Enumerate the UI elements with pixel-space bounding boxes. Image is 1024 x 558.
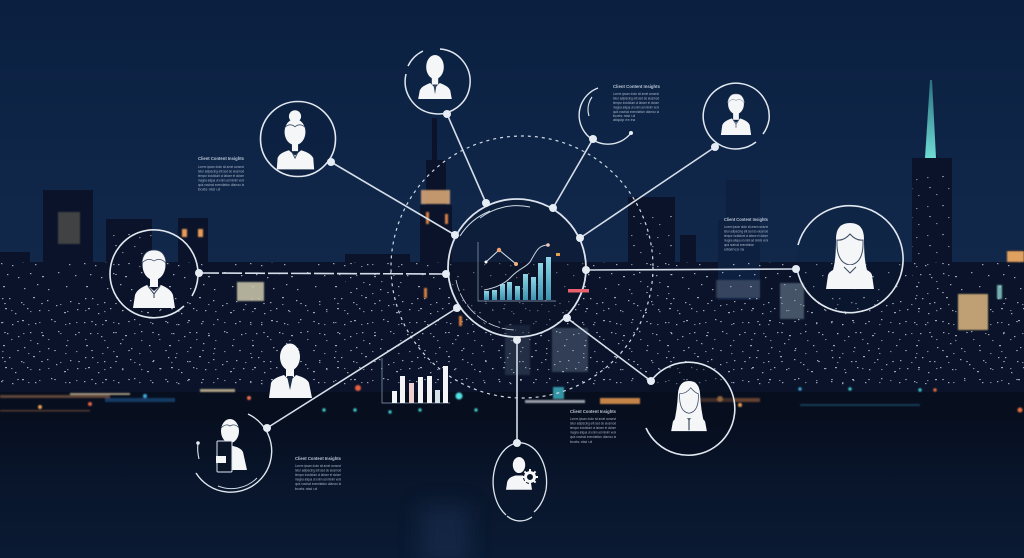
- text block: client note, over right building: Client Content Insights: [724, 217, 768, 223]
- text block: client note, lower left: tetur adipiscing elit sed do eiusmod: [295, 468, 341, 472]
- icon: [506, 457, 532, 490]
- icon: [671, 381, 707, 431]
- text block: client note, top right: boris nisi ut: [613, 114, 636, 118]
- node: [589, 135, 597, 143]
- shoreline lights: [0, 385, 1022, 414]
- node: [327, 158, 335, 166]
- icon: [133, 250, 175, 308]
- person: phone user, bottom left: [196, 414, 272, 492]
- person: man, left: [110, 230, 203, 318]
- open arc: [579, 88, 631, 144]
- ring: [110, 230, 198, 318]
- text block: client note, lower left: tempor incididunt ut labore et dolore: [295, 473, 341, 477]
- axes: [382, 358, 450, 403]
- city skyline: [0, 80, 1024, 422]
- text block: client note, lower centre-right: Client Content Insights: [570, 409, 616, 415]
- text block: client note, lower left: Client Content Insights: [295, 456, 341, 462]
- icon: [418, 55, 452, 99]
- text block: client note, lower left: [295, 456, 342, 491]
- ring: [646, 362, 735, 455]
- lit building: cream block: [237, 282, 264, 301]
- node: [443, 110, 451, 118]
- text block: client note, lower centre-right: quis nostrud exercitation ullamco la: [570, 435, 617, 439]
- person: top right: [703, 83, 769, 151]
- hub nodes: [442, 199, 590, 344]
- icon: [721, 94, 751, 135]
- water reflection: [420, 505, 470, 558]
- skyline silhouette: [0, 118, 1024, 392]
- zigzag markers: [486, 250, 516, 264]
- text block: client note, upper left: tetur adipiscing elit sed do eiusmod: [198, 170, 244, 174]
- text block: client note, lower left: quis nostrud exercitation ullamco la: [295, 482, 342, 486]
- ring: [703, 83, 769, 149]
- text block: client note, top right: tempor incididunt ut labore et dolore: [613, 101, 659, 105]
- text block: client note, lower centre-right: tetur adipiscing elit sed do eiusmod: [570, 422, 616, 426]
- connector lines: [199, 114, 796, 443]
- left arc with dot: [198, 443, 199, 459]
- text block: client note, lower centre-right: magna aliqua ut enim ad minim veni: [570, 430, 616, 434]
- person: woman, right: [792, 206, 903, 313]
- chart bars: [484, 257, 551, 300]
- text block: client note, over right building: quis nostrud exercitation: [724, 243, 754, 247]
- text block: client note, lower left: boris nisi ut: [295, 487, 318, 491]
- text block: client note, lower centre-right: Lorem ipsum dolor sit amet consect: [570, 417, 617, 421]
- ring: [493, 443, 547, 521]
- node: [711, 143, 719, 151]
- window lights: [0, 262, 1024, 390]
- ring: [196, 414, 272, 492]
- text block: client note, over right building: Lorem ipsum dolor sit amet consect: [724, 225, 769, 229]
- gear icon: [522, 469, 538, 485]
- arc gauge, top centre-right: [579, 88, 633, 144]
- hub ring: [448, 199, 586, 337]
- icon: [216, 419, 247, 472]
- text block: client note, upper left: Lorem ipsum dolor sit amet consect: [198, 165, 245, 169]
- text block: client note, upper left: Client Content Insights: [198, 156, 244, 162]
- lit building: right blocks: [505, 251, 1024, 375]
- node: [792, 265, 800, 273]
- text block: client note, lower left: magna aliqua ut enim ad minim veni: [295, 478, 341, 482]
- lit building: left tower: [58, 212, 80, 244]
- node: [195, 269, 203, 277]
- bar chart: lower centre: [382, 358, 450, 403]
- inner arc: [588, 97, 592, 116]
- chart axes: [478, 242, 556, 301]
- text block: client note, top right: quis nostrud exercitation ullamco la: [613, 110, 660, 114]
- text block: client note, top right: magna aliqua ut enim ad minim veni: [613, 106, 659, 110]
- text block: client note, lower centre-right: tempor incididunt ut labore et dolore: [570, 426, 616, 430]
- text block: client note, over right building: magna aliqua ut enim ad minim veni: [724, 238, 768, 242]
- person: free-standing man, lower left: [269, 344, 312, 398]
- text block: client note, upper left: [198, 156, 245, 192]
- icon: [826, 223, 874, 289]
- person: woman with bun, top left: [260, 102, 336, 176]
- text block: client note, top right: [613, 84, 660, 122]
- person: woman, bottom right: [646, 362, 735, 455]
- text block: client note, top right: Client Content Insights: [613, 84, 660, 90]
- lit building: orange crown left: [182, 229, 203, 237]
- node: [647, 377, 655, 385]
- text block: client note, upper left: quis nostrud exercitation ullamco la: [198, 183, 245, 187]
- text block: client note, top right: aliquip ex ea: [613, 118, 636, 122]
- text block: client note, upper left: boris nisi ut: [198, 188, 221, 192]
- dashed orbit ring: [391, 136, 653, 398]
- icon: [277, 110, 314, 169]
- text block: client note, lower left: Lorem ipsum dolor sit amet consect: [295, 464, 342, 468]
- water: [0, 420, 1024, 558]
- spire: right tower: [925, 80, 936, 158]
- red label: [568, 289, 589, 292]
- tower windows: [0, 175, 1024, 385]
- text block: client note, lower centre-right: boris nisi ut: [570, 440, 593, 444]
- text block: client note, over right building: tempor incididunt ut labore et dolore: [724, 234, 768, 238]
- text block: client note, upper left: tempor incididunt ut labore et dolore: [198, 174, 244, 178]
- text block: client note, over right building: ullamco la: [724, 248, 745, 252]
- node: [263, 424, 271, 432]
- text block: client note, over right building: tetur adipiscing elit sed do eiusmod: [724, 230, 768, 234]
- ring: [260, 102, 336, 176]
- lit building: central tower top: [421, 190, 450, 204]
- background: night sky: [0, 0, 1024, 420]
- text block: client note, over right building: [724, 217, 769, 252]
- text block: client note, top right: Lorem ipsum dolor sit amet consect: [613, 92, 660, 96]
- text block: client note, top right: tetur adipiscing elit sed do eiusmod: [613, 96, 659, 100]
- text block: client note, upper left: magna aliqua ut enim ad minim veni: [198, 178, 244, 182]
- trend line: [484, 245, 548, 290]
- central hub: [442, 199, 590, 344]
- bars: [392, 366, 448, 403]
- bright shoreline band: [0, 392, 1024, 422]
- hub chart: [478, 242, 560, 301]
- inner arc: [218, 478, 257, 489]
- end dot: [629, 131, 633, 135]
- text block: client note, lower centre-right: [570, 409, 617, 444]
- person: man, top: [405, 49, 470, 118]
- person: gear, bottom centre: [493, 439, 547, 521]
- ring: [797, 206, 903, 313]
- node: [513, 439, 521, 447]
- hub inner arcs: [460, 211, 490, 236]
- ring: [405, 49, 470, 114]
- central tower lower lights: [424, 212, 462, 326]
